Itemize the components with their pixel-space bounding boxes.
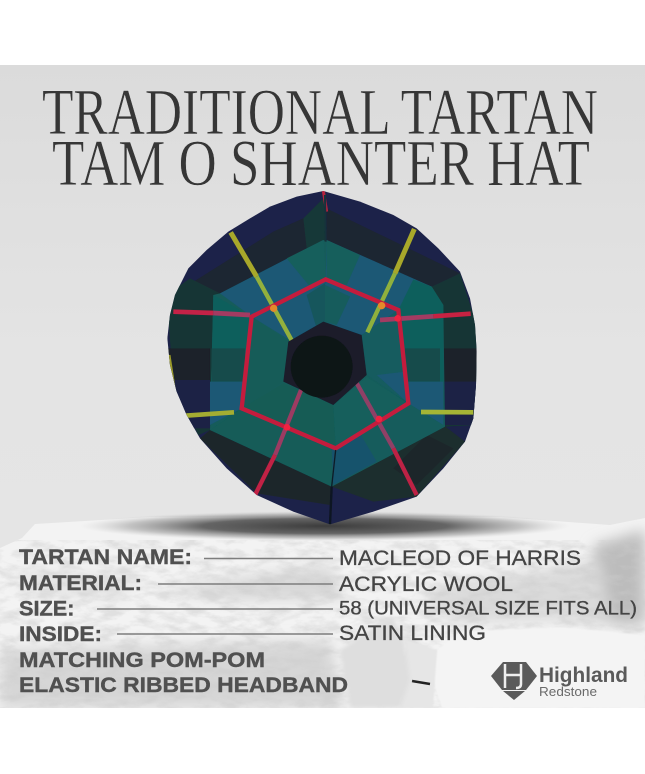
- red stripes: [173, 191, 471, 495]
- logo: Highland Redstone: Redstone: [539, 684, 597, 699]
- inner panels: [242, 279, 408, 448]
- specification labels: MATERIAL:: [19, 572, 142, 595]
- pom-pom: [291, 336, 353, 398]
- icon: diamond monogram: [491, 662, 537, 700]
- specification values: 58 (UNIVERSAL SIZE FITS ALL): [339, 598, 637, 620]
- teal base: [210, 240, 445, 487]
- specification values: MACLEOD OF HARRIS: [339, 547, 581, 570]
- hat shadow: [80, 511, 570, 541]
- title: [42, 76, 598, 200]
- specification labels: [19, 546, 348, 697]
- hat base navy: [160, 185, 485, 528]
- tartan hat: [160, 185, 485, 528]
- specification labels: INSIDE:: [19, 623, 102, 646]
- logo: Highland Redstone: [491, 662, 628, 700]
- hat seams: [325, 195, 336, 524]
- specification labels: ELASTIC RIBBED HEADBAND: [19, 674, 348, 697]
- red hexagon: [242, 279, 408, 448]
- teal sectors: [210, 240, 445, 487]
- specification labels: SIZE:: [19, 598, 74, 620]
- gap between rocks: [406, 646, 436, 708]
- hub: [283, 322, 367, 405]
- specification values: ACRYLIC WOOL: [339, 573, 513, 596]
- logo: Highland Redstone: Highland: [539, 664, 628, 687]
- lower left rock edge: [340, 616, 410, 708]
- specification labels: TARTAN NAME:: [19, 546, 192, 569]
- specification values: [339, 547, 637, 645]
- specification values: SATIN LINING: [339, 622, 486, 645]
- specification labels: MATCHING POM-POM: [19, 649, 265, 672]
- rock plinth: [0, 515, 645, 708]
- lower right rock block: [433, 627, 645, 708]
- dark outer bands: [167, 198, 477, 505]
- yellow stripes: [169, 229, 473, 416]
- stripe crossings: [270, 302, 401, 431]
- connector lines: [97, 558, 333, 634]
